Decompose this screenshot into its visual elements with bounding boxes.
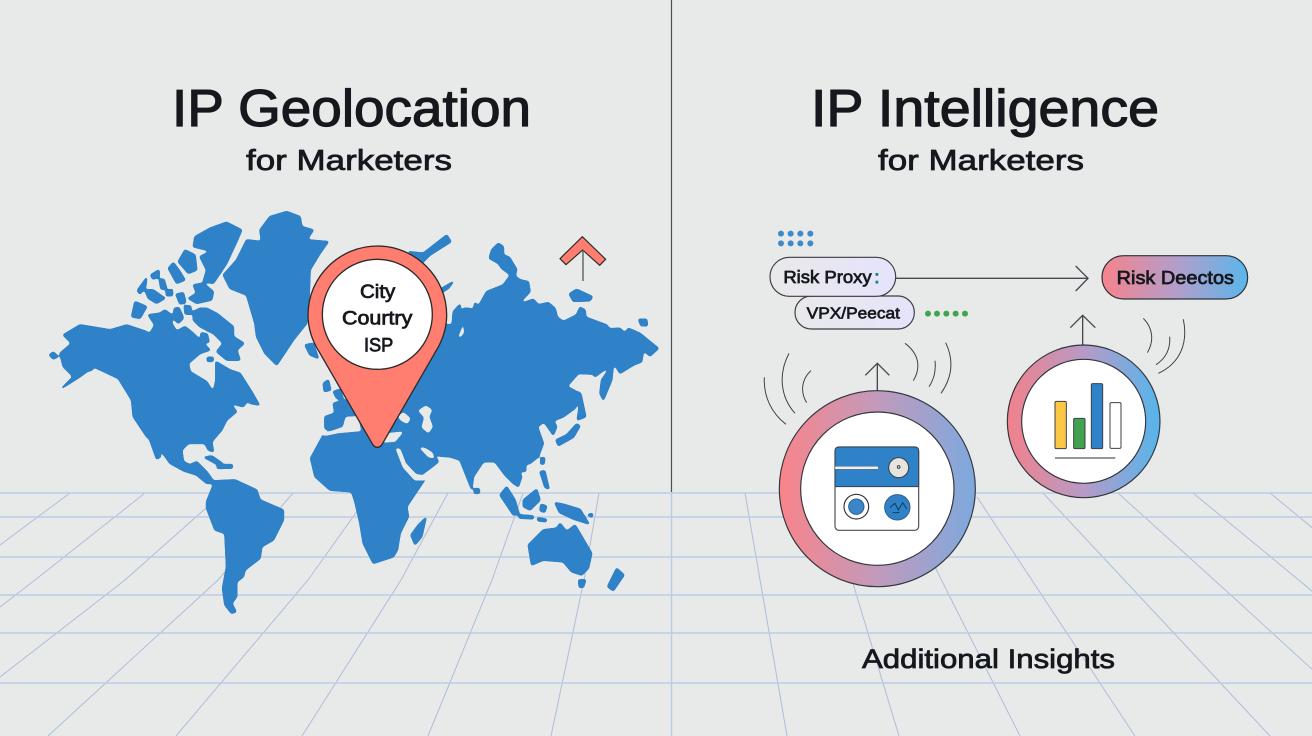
map pin [308, 246, 447, 447]
pill: Risk Proxy: Risk Proxy [783, 267, 872, 287]
icon: up chevron arrow [560, 237, 606, 281]
subtitle: for Marketers: for Marketers [878, 145, 1084, 177]
signal waves: right ring [1143, 318, 1185, 373]
map pin: ISP [364, 335, 393, 356]
map: Europe, Africa, Asia, Oceania [305, 235, 658, 591]
pill: VPX/Peecat [795, 296, 914, 329]
arrow: left ring up [865, 363, 889, 391]
panel: IP Intelligence [764, 80, 1248, 674]
panel: IP Geolocation [49, 80, 658, 613]
map pin: Courtry [342, 309, 413, 330]
world map [49, 212, 658, 613]
bar chart [1055, 384, 1121, 458]
caption: Additional Insights: Additional Insights [862, 644, 1115, 674]
pill: Risk Proxy: : [874, 267, 879, 287]
arrow: Risk Proxy to Risk Deectos [896, 266, 1088, 291]
ring: device [779, 391, 975, 587]
pill: Risk Deectos [1102, 256, 1248, 299]
signal waves: left ring [764, 343, 951, 424]
subtitle: for Marketers: for Marketers [246, 145, 452, 177]
arrow: right ring up [1070, 315, 1095, 345]
centre divider [670, 0, 672, 492]
ring: bar chart [1007, 345, 1160, 498]
icon: green dots [925, 311, 968, 317]
icon: blue dot grid [778, 231, 813, 246]
title: IP Intelligence: IP Intelligence [811, 80, 1159, 138]
map pin: City [360, 282, 396, 303]
pill: Risk Deectos: Risk Deectos [1117, 267, 1234, 288]
icon: device panel [835, 447, 919, 530]
map: Americas and Arctic [49, 212, 328, 613]
pill: VPX/Peecat: VPX/Peecat [807, 306, 901, 323]
diagram [764, 231, 1248, 587]
title: IP Geolocation: IP Geolocation [172, 80, 531, 138]
pill: Risk Proxy [770, 257, 896, 296]
map: inland seas [318, 406, 434, 480]
